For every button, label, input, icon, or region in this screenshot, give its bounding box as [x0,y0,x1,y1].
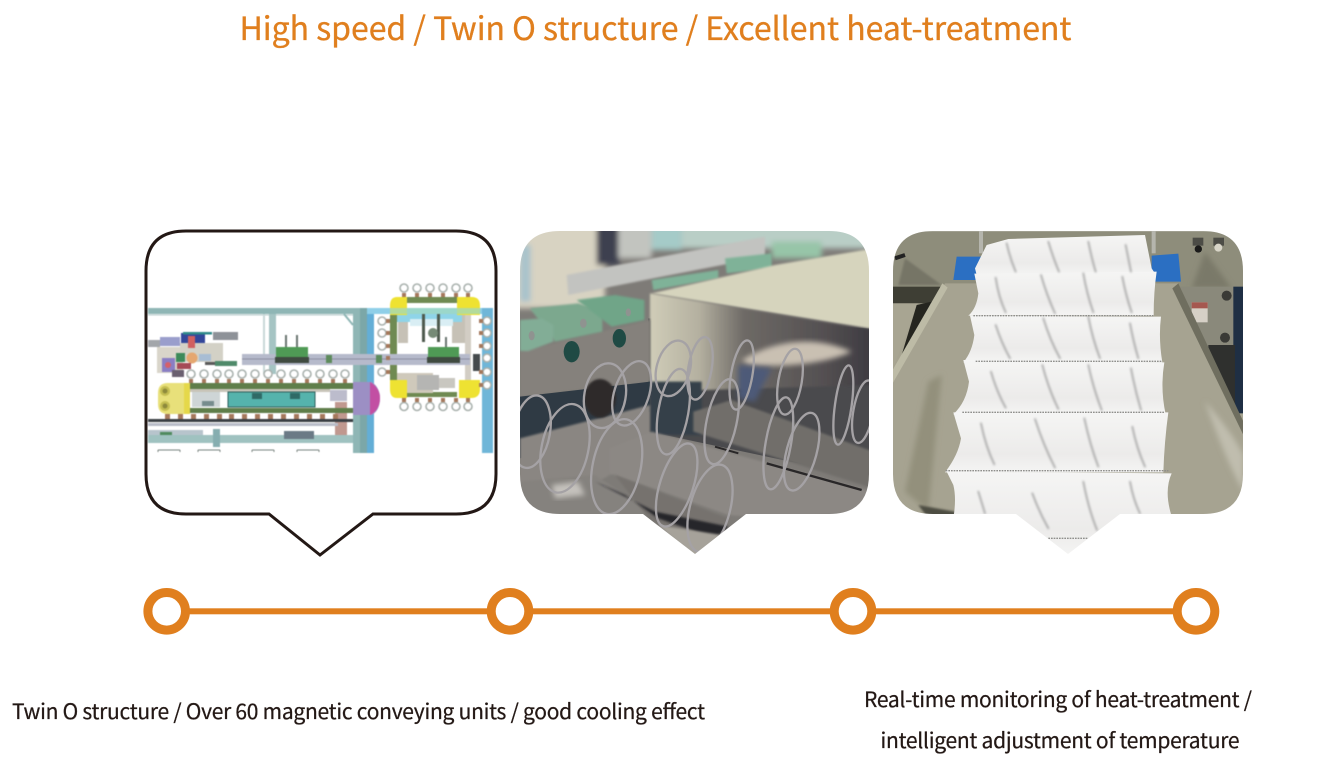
switches [1193,238,1203,246]
metal trays [693,400,873,488]
fabric shadow creases [978,242,1145,530]
main horizontal rail [242,354,470,365]
panel: pocket springs photo [885,225,1252,562]
yellow corners [390,297,407,315]
warning label and bolts [1192,302,1208,322]
timeline node 1 [148,592,186,630]
brown block and grey details [335,402,347,443]
left feed mechanism [148,332,238,377]
pink bend [353,382,380,415]
blurred background [520,231,865,312]
timeline node 2 [491,592,529,630]
title: High speed / Twin O structure / Excellent heat-treatment [240,4,1072,50]
cream box inner wall [650,293,873,392]
carriages on rail [276,347,308,357]
caption: right: intelligent adjustment of temperature [880,725,1240,755]
timeline connector [167,608,1196,614]
caption: right: Real-time monitoring of heat-treatment / [864,684,1252,714]
Twin O upper loop [397,303,465,395]
aluminium rail [567,237,765,295]
brown carriers [165,293,483,419]
metal plate and lower dark area [648,320,651,382]
interior dark background [648,318,869,462]
round holes [564,341,580,362]
posts behind the fabric [979,230,983,253]
stitched seams [946,316,1168,538]
green insulators [530,303,602,342]
conveyor coil rings [187,284,491,410]
bottom rails [148,419,353,422]
lower conveyor bars [190,383,353,389]
caption: right [864,684,1252,755]
schematic drawing [148,284,493,453]
tray [938,284,1232,412]
timeline node 4 [1177,592,1215,630]
panel: Twin O structure schematic [146,231,496,555]
blue guides [953,257,983,280]
pocket spring fabric [945,235,1172,555]
coil springs [507,335,879,557]
speech bubble outline [146,231,496,555]
timeline node 3 [834,592,872,630]
panel: coil springs photo [520,231,869,554]
machine back wall [893,232,1243,286]
timeline [148,592,1215,630]
frame beams [148,308,370,314]
yellow turnaround head [158,383,190,414]
cream box top [652,248,873,329]
caption: left: Twin O structure / Over 60 magnetic conveying units / good cooling effect [12,696,705,726]
